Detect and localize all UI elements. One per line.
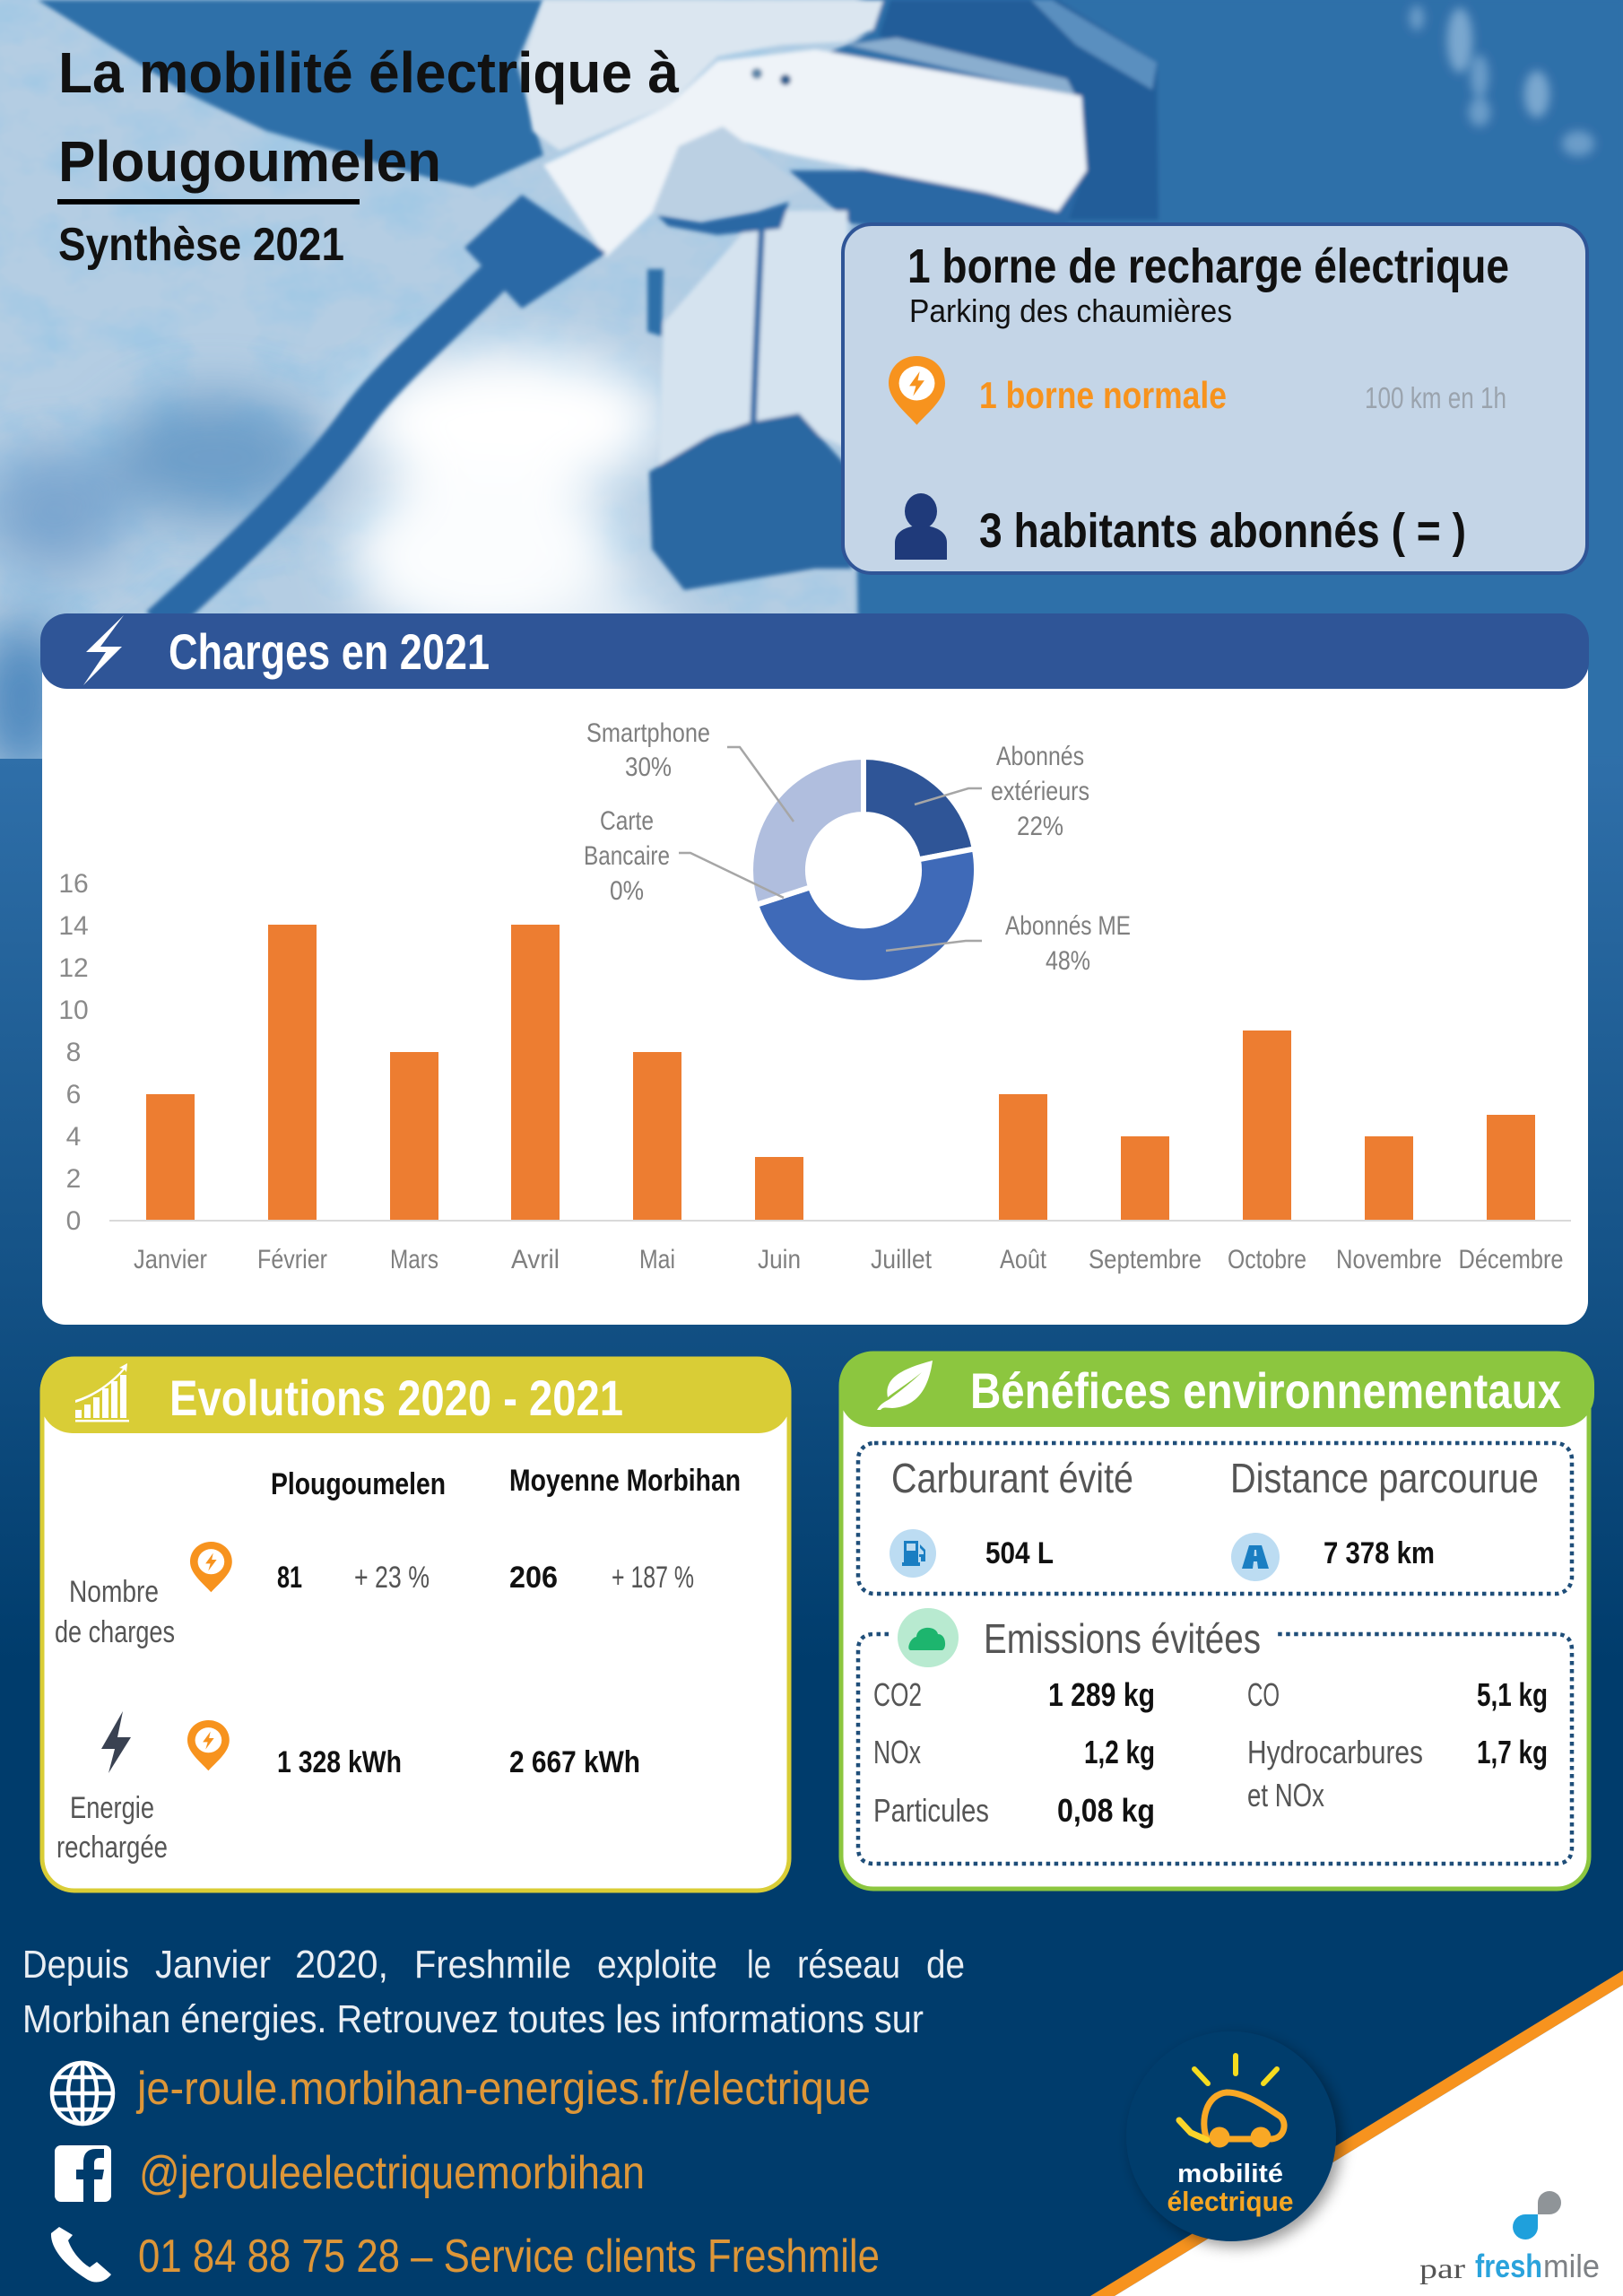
change: +23%: + 23 % (354, 1561, 430, 1595)
emission rows: CO2 (873, 1676, 922, 1713)
y axis labels: 14 (58, 911, 89, 941)
y axis labels (58, 869, 89, 1236)
location: Parking des chaumières (909, 292, 1232, 329)
value: energy local: 1 328 kWh (277, 1745, 402, 1779)
emission rows: Hydrocarbures (1247, 1734, 1423, 1770)
logo: freshmile (1419, 2191, 1600, 2284)
icon: leaf (877, 1361, 933, 1410)
column heading: Moyenne Morbihan: Moyenne Morbihan (509, 1464, 741, 1498)
intro text: Janvier (155, 1943, 271, 1987)
donut chart: charge types (584, 718, 1131, 983)
icon: energy bolt (101, 1711, 131, 1773)
intro text: le (747, 1943, 771, 1987)
icon: charging pin (187, 1720, 230, 1770)
value: energy average: 2 667 kWh (509, 1745, 640, 1779)
donut labels: Abonnés (996, 742, 1084, 771)
month labels (134, 1245, 1564, 1274)
intro text: Depuis (22, 1943, 129, 1987)
photo thin strap (753, 220, 762, 426)
icon: road (1231, 1533, 1280, 1581)
panel: evolutions 2020-2021 (40, 1357, 791, 1891)
icon: lightning bolt (83, 615, 124, 685)
y axis labels: 2 (66, 1164, 81, 1194)
heading: evolutions: Evolutions 2020 - 2021 (169, 1370, 623, 1426)
photo dark gap under handle (789, 170, 1085, 224)
icon: globe (52, 2063, 113, 2124)
row label: nombre de charges: Nombre (69, 1575, 159, 1609)
intro text: réseau (797, 1943, 900, 1987)
phone number: 01 84 88 75 28 – Service clients Freshmile (138, 2231, 880, 2283)
heading: charging station: 1 borne de recharge électrique (907, 239, 1509, 293)
panel header (40, 1357, 791, 1433)
month labels: Mars (390, 1245, 438, 1274)
title block (57, 40, 679, 271)
column heading: Plougoumelen: Plougoumelen (271, 1467, 446, 1501)
icon: rays (1194, 2056, 1277, 2083)
emissions heading: Emissions évitées (984, 1615, 1261, 1662)
icon: charging pin (190, 1542, 232, 1592)
icon: charging pin (889, 356, 945, 425)
row label: energie rechargee: Energie (70, 1791, 154, 1825)
y axis labels: 8 (66, 1038, 81, 1067)
photo plug handle (543, 49, 1087, 257)
row label: energie rechargee: rechargée (56, 1831, 168, 1865)
badge: mobilite electrique logo (1126, 2031, 1336, 2241)
panel: environmental benefits (839, 1352, 1594, 1889)
emission rows: Particules (873, 1792, 989, 1829)
badge text (1167, 2160, 1293, 2217)
photo streaks (1410, 5, 1594, 156)
emission rows: 0,08 kg (1057, 1792, 1155, 1829)
photo right side blue (830, 0, 1084, 613)
intro text (22, 1943, 965, 2041)
intro text: Freshmile (414, 1943, 571, 1987)
intro text: exploite (597, 1943, 717, 1987)
panel header (839, 1352, 1594, 1427)
month labels: Décembre (1458, 1245, 1564, 1274)
month labels: Juillet (871, 1245, 933, 1274)
row label: nombre de charges (55, 1575, 175, 1649)
y axis labels: 0 (66, 1206, 81, 1236)
emission rows: et NOx (1247, 1777, 1324, 1813)
row label: nombre de charges: de charges (55, 1615, 175, 1649)
website link: je-roule.morbihan-energies.fr/electrique (135, 2063, 871, 2115)
donut labels: 30% (625, 752, 672, 782)
badge text: électrique (1167, 2186, 1293, 2217)
dotted box: avoided emissions (858, 1608, 1572, 1864)
emission rows: CO (1247, 1676, 1280, 1713)
title block: Plougoumelen (58, 129, 441, 194)
month labels: Mai (639, 1245, 675, 1274)
corner: white triangle with orange stripe (1090, 1970, 1623, 2296)
donut labels: Smartphone (586, 718, 710, 748)
donut labels: 48% (1046, 946, 1090, 976)
photo lower fingers (652, 126, 804, 219)
donut labels: extérieurs (991, 777, 1089, 806)
photo dark area behind plug (38, 0, 543, 187)
value: 206: 206 (509, 1561, 558, 1595)
value: 81: 81 (277, 1561, 302, 1595)
intro text: de (926, 1943, 965, 1987)
intro text: 2020, (295, 1943, 388, 1987)
month labels: Février (257, 1245, 327, 1274)
icon: car with plug (1179, 2092, 1284, 2144)
normal charger count: 1 borne normale (979, 374, 1227, 416)
icon: rising bars (75, 1363, 129, 1422)
y axis labels: 4 (66, 1122, 81, 1152)
logo: freshmile: mile (1543, 2248, 1600, 2284)
photo socket rim (1031, 0, 1157, 90)
month labels: Octobre (1228, 1245, 1306, 1274)
leader lines (679, 747, 982, 951)
month labels: Septembre (1089, 1245, 1202, 1274)
title block: Synthèse 2021 (58, 219, 344, 271)
panel: charging station info (843, 224, 1587, 573)
photo light strip behind strap (659, 211, 847, 466)
logo: freshmile: fresh (1475, 2248, 1542, 2284)
emission rows: NOx (873, 1734, 921, 1770)
y axis labels: 10 (58, 996, 89, 1025)
emission rows: 1,2 kg (1084, 1734, 1155, 1770)
value: distance: 7 378 km (1324, 1536, 1435, 1570)
donut labels: Bancaire (584, 841, 670, 871)
emission rows: 1 289 kg (1048, 1676, 1155, 1713)
value: fuel: 504 L (985, 1536, 1054, 1570)
photo cable (158, 274, 498, 624)
bar chart: monthly charges (58, 869, 1571, 1274)
y axis labels: 16 (58, 869, 89, 899)
month labels: Novembre (1336, 1245, 1442, 1274)
badge text: mobilité (1177, 2160, 1283, 2188)
donut labels: Carte (600, 806, 654, 836)
panel header (40, 613, 1589, 689)
emission rows (873, 1676, 1548, 1829)
donut labels: 0% (610, 876, 644, 906)
dotted box: fuel and distance (858, 1443, 1572, 1594)
emission rows: 5,1 kg (1477, 1676, 1548, 1713)
photo dark streak (647, 269, 664, 336)
donut labels: Abonnés ME (1005, 911, 1131, 941)
icon: drops (1513, 2191, 1561, 2239)
charger speed: 100 km en 1h (1365, 381, 1506, 414)
subscribers: 3 habitants abonnés ( = ) (979, 504, 1466, 558)
intro text: Morbihan énergies. Retrouvez toutes les informations sur (22, 1997, 924, 2041)
photo dangling connector (649, 413, 852, 590)
icon: person (895, 493, 947, 560)
y axis labels: 12 (58, 953, 89, 983)
icon: facebook (55, 2145, 111, 2202)
logo: freshmile: par (1419, 2252, 1465, 2284)
icon: fuel pump (890, 1529, 936, 1578)
panel: charges 2021 (40, 613, 1589, 1325)
month labels: Avril (511, 1245, 560, 1274)
background photo: hand plugging in charging cable (0, 0, 1623, 807)
photo handle dots (751, 68, 762, 79)
facebook handle: @jerouleelectriquemorbihan (139, 2147, 645, 2199)
photo upper hand (522, 0, 883, 151)
fuel label: Carburant évité (891, 1455, 1133, 1501)
distance label: Distance parcourue (1230, 1455, 1539, 1501)
photo cable strain relief (464, 195, 606, 309)
photo dark charger socket (879, 0, 1159, 220)
row label: energie rechargee (56, 1791, 168, 1865)
month labels: Juin (758, 1245, 801, 1274)
donut labels: 22% (1017, 812, 1063, 841)
icon: cloud (898, 1608, 959, 1667)
heading: charges: Charges en 2021 (169, 623, 490, 680)
y axis labels: 6 (66, 1080, 81, 1109)
change: +187%: + 187 % (612, 1561, 694, 1595)
month labels: Août (1000, 1245, 1047, 1274)
bars (146, 925, 1535, 1221)
title block: La mobilité électrique à (58, 40, 679, 105)
emission rows: 1,7 kg (1477, 1734, 1548, 1770)
icon: phone (51, 2227, 111, 2282)
donut labels (584, 718, 1131, 976)
month labels: Janvier (134, 1245, 207, 1274)
